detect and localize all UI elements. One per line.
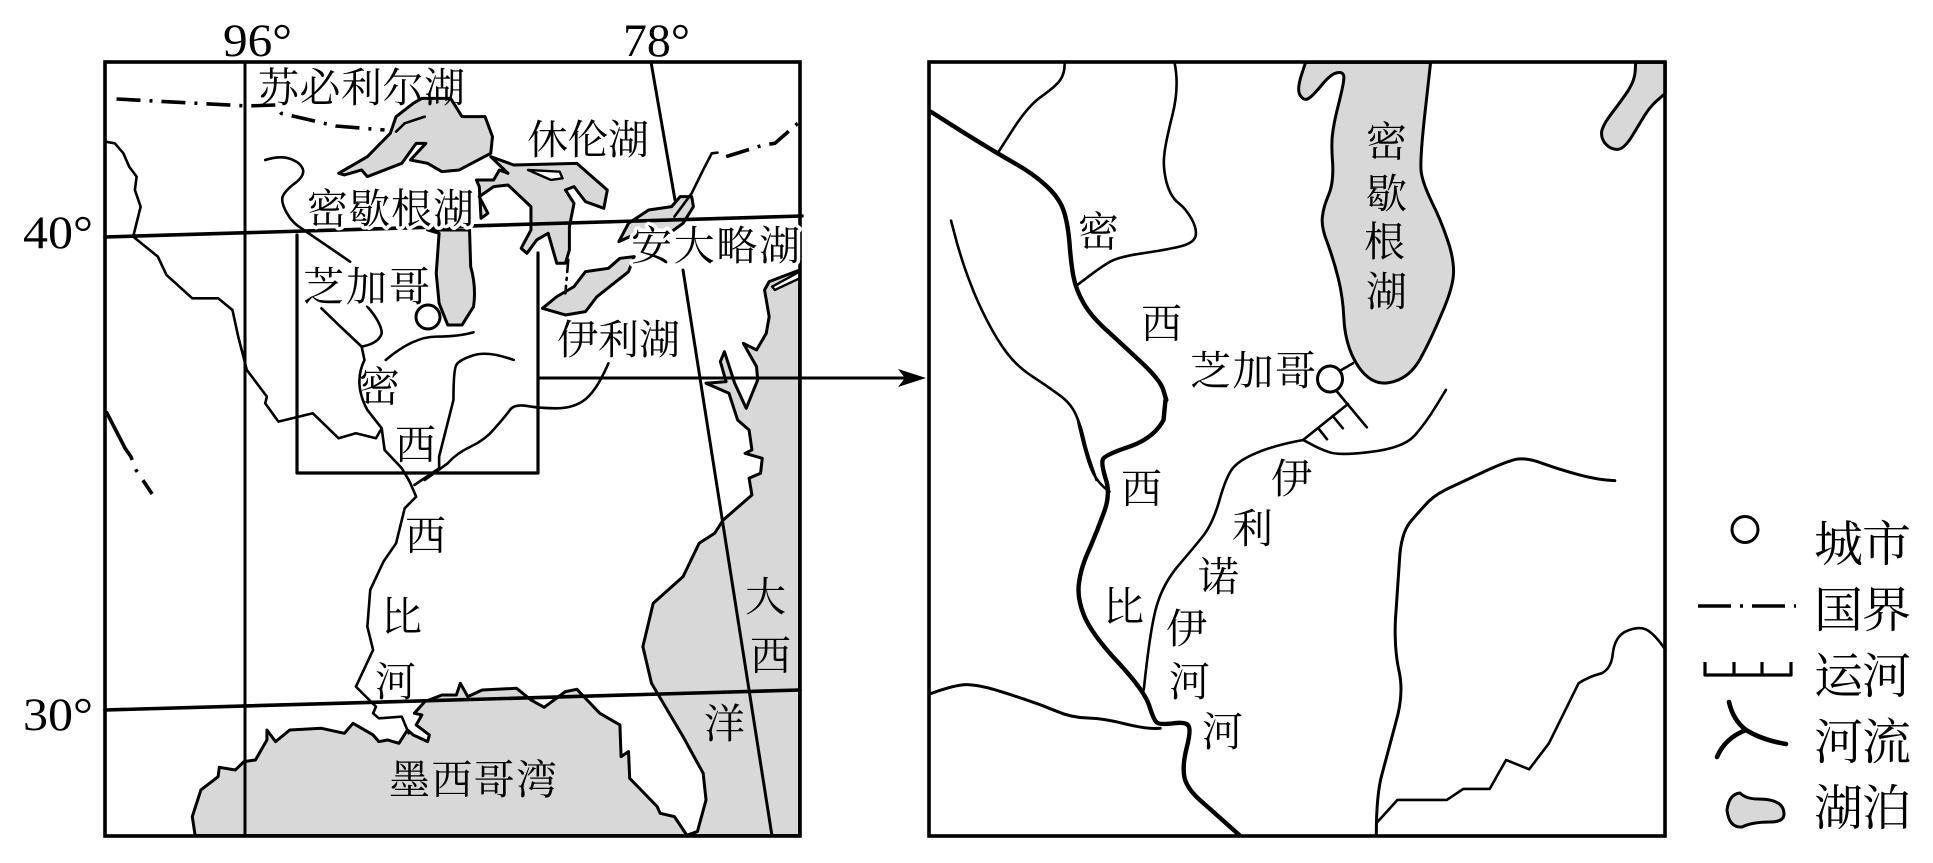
- Lake Michigan label: 湖: [1366, 269, 1407, 315]
- river and water labels: 墨西哥湾: [389, 757, 557, 803]
- Chicago label: 芝加哥: [1190, 348, 1316, 394]
- legend text: national border: 国界: [1814, 583, 1911, 638]
- Mississippi River lower course: [356, 468, 439, 733]
- Lake Michigan label: [1364, 119, 1407, 315]
- Chicago canal: [1303, 363, 1367, 440]
- longitude and latitude labels: [23, 15, 690, 741]
- legend text: lake: 湖泊: [1814, 781, 1911, 836]
- river and water labels: 西: [405, 513, 446, 559]
- national borders: [106, 99, 798, 494]
- river and water labels: 西: [395, 422, 436, 468]
- Mississippi River label: 比: [1103, 584, 1144, 630]
- rivers upper basin: [105, 142, 718, 480]
- legend text: canal: 运河: [1814, 649, 1911, 704]
- Great Lakes: [339, 98, 693, 325]
- longitude and latitude labels: 30°: [23, 689, 93, 741]
- river and water labels: [359, 364, 791, 803]
- Illinois River label: 河: [1169, 659, 1210, 705]
- icon: national border: [1698, 604, 1796, 608]
- Lake Michigan label: 歇: [1366, 171, 1407, 217]
- river and water labels: 比: [381, 594, 422, 640]
- river and water labels: 河: [375, 659, 416, 705]
- river and water labels: 密: [359, 364, 400, 410]
- inset frame: [929, 62, 1665, 836]
- river and water labels: 大: [745, 574, 786, 620]
- panel: right inset map: [929, 62, 1666, 836]
- lake labels: 休伦湖: [527, 117, 649, 163]
- lake labels: [258, 65, 800, 363]
- Illinois River label: [1166, 456, 1312, 705]
- graticule meridians and parallels: [105, 62, 802, 836]
- Illinois River label: 诺: [1198, 554, 1239, 600]
- icon: river: [1717, 702, 1786, 757]
- legend text: city: 城市: [1814, 517, 1911, 572]
- longitude and latitude labels: 78°: [623, 15, 690, 67]
- Chicago city marker: [1318, 366, 1342, 392]
- longitude and latitude labels: 40°: [23, 207, 93, 259]
- arrow to inset map: [538, 369, 926, 387]
- legend text: river: 河流: [1814, 715, 1911, 770]
- Gulf of Mexico water: [192, 683, 687, 836]
- Lake Michigan label: 密: [1366, 119, 1407, 165]
- Lake Michigan label: 根: [1364, 219, 1405, 265]
- river and water labels: 西: [750, 633, 791, 679]
- icon: lake: [1727, 793, 1784, 827]
- city marker: Chicago: [416, 305, 440, 329]
- city label: Chicago: 芝加哥: [303, 264, 430, 310]
- lake labels: 密歇根湖: [307, 186, 474, 232]
- river and water labels: 洋: [704, 701, 745, 747]
- Mississippi River label: 河: [1202, 709, 1243, 755]
- Mississippi River label: 密: [1078, 209, 1119, 255]
- Illinois River label: 伊: [1271, 456, 1312, 502]
- legend: [1698, 516, 1911, 836]
- panel: left overview map: [23, 15, 926, 836]
- Mississippi River label: [1078, 209, 1243, 755]
- inset locator box: [297, 235, 538, 473]
- Mississippi River label: 西: [1121, 466, 1162, 512]
- Mississippi River and upper tributaries: [931, 62, 1446, 480]
- Lake Michigan: [1299, 62, 1665, 383]
- Atlantic Ocean water: [643, 270, 800, 836]
- lake labels: 安大略湖: [631, 223, 800, 269]
- icon: city: [1732, 516, 1758, 542]
- lake labels: 伊利湖: [557, 317, 680, 363]
- lake labels: 苏必利尔湖: [258, 65, 465, 111]
- Illinois River label: 伊: [1166, 606, 1207, 652]
- longitude and latitude labels: 96°: [223, 15, 292, 67]
- Mississippi River label: 西: [1141, 301, 1182, 347]
- icon: canal: [1705, 662, 1791, 675]
- map frame: [105, 62, 800, 836]
- lower rivers: [930, 400, 1666, 836]
- Illinois River label: 利: [1232, 506, 1273, 552]
